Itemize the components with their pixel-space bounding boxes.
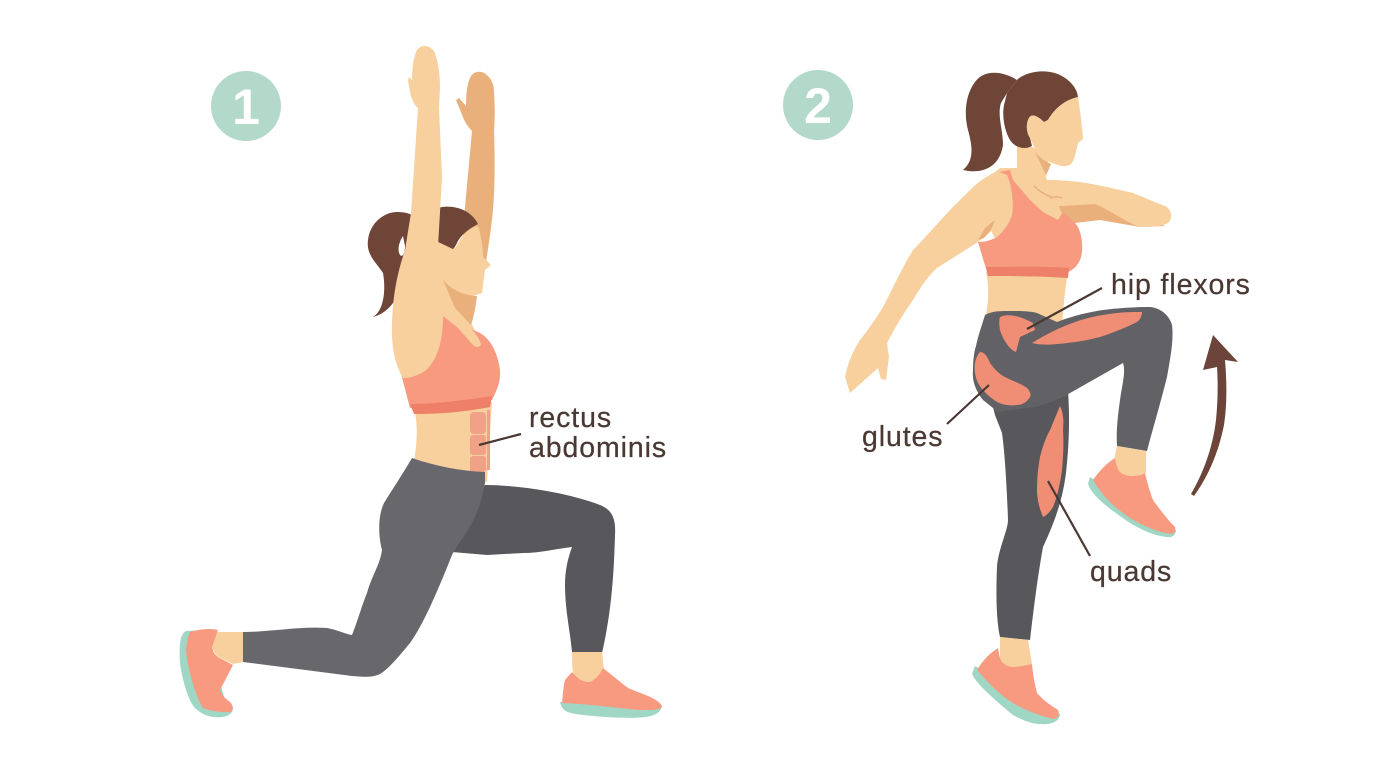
skin base of neck and chest [973, 145, 1072, 250]
back shoe sole [180, 630, 233, 717]
badge: step 1 [211, 71, 281, 141]
hip flexor muscle [999, 315, 1035, 352]
armpit shadow [978, 220, 995, 240]
front ankle [572, 652, 604, 682]
label: rectus abdominis: abdominis [529, 432, 667, 464]
rectus abdominis muscle [470, 410, 490, 472]
white gap in ponytail [399, 236, 405, 256]
figure 1: lunge with raised arms [180, 46, 662, 718]
quads muscle [1037, 406, 1063, 517]
shoulder and near arm [392, 46, 481, 378]
label: rectus abdominis [479, 402, 667, 464]
back shoe [186, 629, 233, 712]
chin shadow [1035, 152, 1051, 175]
label: glutes: glutes [862, 421, 943, 453]
label: rectus abdominis: rectus [529, 402, 612, 434]
hips and raised thigh [973, 307, 1173, 451]
near arm [845, 170, 1005, 393]
ponytail and hair [368, 207, 478, 317]
face [1027, 97, 1083, 166]
figure 2: high knee raise [845, 71, 1176, 724]
finger creases [1034, 186, 1062, 198]
badge: step 2: 2 [804, 78, 832, 134]
near leg in leggings [242, 458, 485, 677]
standing leg [990, 390, 1069, 640]
label: glutes [862, 385, 989, 453]
back foot ankle [210, 632, 243, 664]
raised shoe [1093, 458, 1175, 534]
torso skin [985, 272, 1068, 325]
badge: step 2 [783, 70, 853, 140]
label: hip flexors: hip flexors [1111, 269, 1251, 301]
raised foot ankle [1114, 446, 1146, 478]
standing ankle [1000, 637, 1032, 669]
glutes muscle [975, 352, 1031, 405]
head [437, 226, 491, 296]
far arm raised [456, 72, 495, 268]
hand on chest [1032, 180, 1171, 227]
torso skin [412, 402, 492, 482]
standing shoe [977, 648, 1059, 719]
bra band [410, 396, 492, 414]
raised thigh muscle [1032, 312, 1142, 345]
sports bra [978, 170, 1082, 272]
sports bra [400, 316, 500, 408]
ponytail [963, 73, 1017, 171]
front shoe [562, 668, 662, 710]
label: quads [1048, 481, 1172, 588]
raised shoe sole [1088, 477, 1176, 537]
front shoe sole [560, 701, 662, 718]
badge: step 1: 1 [232, 79, 260, 135]
neck shadow [443, 280, 477, 325]
head hair [1003, 71, 1078, 148]
far arm shadow [1058, 198, 1165, 227]
label: hip flexors [1027, 269, 1251, 329]
arrow: upward motion [1191, 335, 1238, 496]
standing shoe sole [972, 666, 1060, 724]
skin base of shoulder and neck [400, 240, 482, 362]
label: quads: quads [1090, 556, 1172, 588]
far leg in leggings [452, 485, 615, 653]
bra band [986, 267, 1069, 278]
